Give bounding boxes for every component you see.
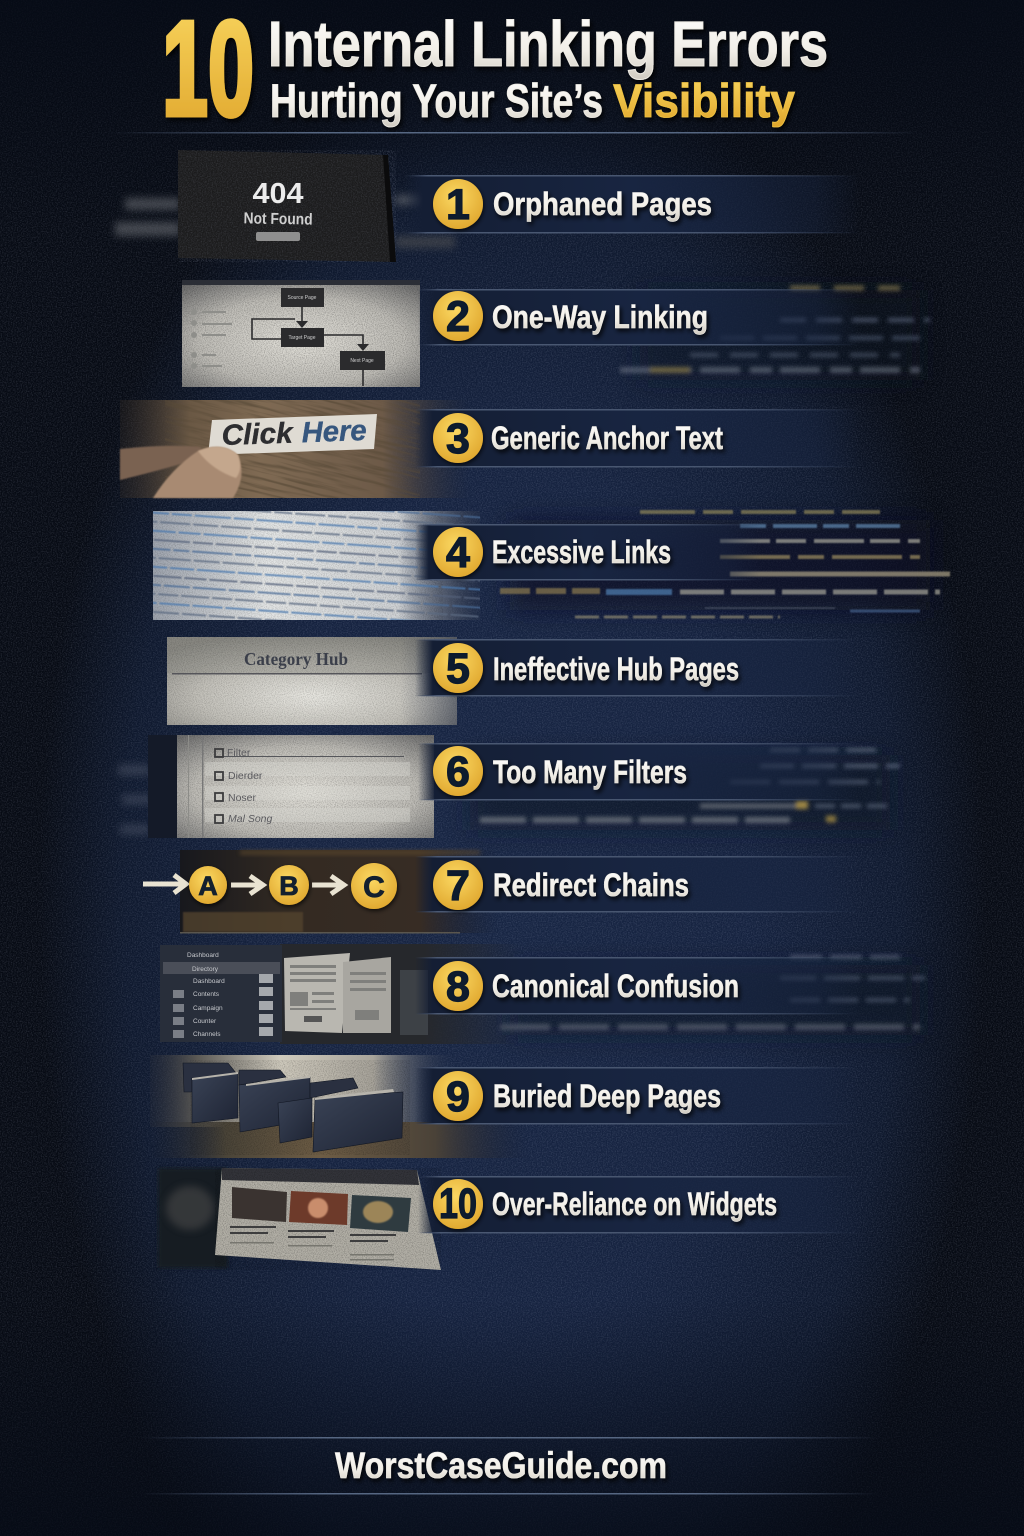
banner: [415, 856, 860, 912]
label: One-Way Linking: [492, 299, 708, 335]
label: Excessive Links: [492, 534, 671, 570]
number badge: 10: [439, 1180, 477, 1228]
footer website: WorstCaseGuide.com: [335, 1445, 667, 1486]
photo: filter checklist: [148, 735, 434, 838]
row 6: too many filters: [118, 735, 900, 838]
title: [162, 0, 828, 144]
number badge: 5: [446, 645, 470, 693]
blurred code background: [620, 288, 930, 380]
duplicate pages: [284, 953, 428, 1035]
sidebar panel: [160, 945, 282, 1042]
number badge: 2: [446, 293, 470, 341]
label: Ineffective Hub Pages: [493, 651, 739, 687]
row 1: orphaned pages: [115, 150, 860, 262]
number badge: 6: [446, 748, 470, 796]
number badge: 7: [446, 862, 470, 910]
arrows: [143, 875, 344, 894]
row 3: generic anchor text: [119, 400, 850, 499]
photo: filter checklist: Noser: [228, 792, 257, 804]
photo: 404 not found screen: Not Found: [243, 210, 313, 229]
photo: A B C redirect chain: [143, 850, 500, 934]
photo: filter checklist: Filter: [227, 747, 251, 759]
row 9: buried deep pages: [150, 1055, 860, 1158]
sidebar panel: Channels: [193, 1031, 221, 1038]
title line two: Hurting Your Site’s: [270, 74, 603, 127]
blurred code background: [500, 512, 950, 617]
label: Generic Anchor Text: [491, 420, 723, 456]
row 4: excessive links: [153, 509, 951, 620]
photo: duplicate pages and panel: [160, 944, 520, 1044]
banner: [418, 743, 860, 800]
photo: stacked folders: [150, 1055, 530, 1158]
title line two: Visibility: [613, 74, 795, 127]
number badge: [433, 643, 483, 693]
photo: flowchart page: Next Page: [350, 358, 374, 364]
number badge: [433, 291, 483, 341]
photo: click here label on wood: [119, 400, 451, 499]
number badge: [433, 1071, 483, 1121]
photo: click here label on wood: Click: [221, 417, 295, 452]
photo: 404 not found screen: [115, 150, 455, 262]
sidebar panel: Dashboard: [193, 978, 225, 985]
sidebar panel: Campaign: [193, 1005, 223, 1012]
number badge: 9: [446, 1073, 470, 1121]
number badge: [433, 179, 483, 229]
number badge: [433, 860, 483, 910]
photo: widget cards page: [158, 1168, 441, 1270]
photo: category hub page: [167, 637, 457, 725]
row 7: redirect chains: [143, 850, 860, 934]
number badge: 3: [446, 415, 470, 463]
banner: [405, 175, 860, 234]
photo: category hub page: Category Hub: [244, 649, 348, 669]
photo: flowchart page: [182, 280, 420, 387]
number badge: [433, 746, 483, 796]
label: Too Many Filters: [493, 754, 687, 790]
number badge: 8: [446, 963, 470, 1011]
label: Orphaned Pages: [493, 186, 712, 222]
circles A B C: [189, 863, 397, 909]
photo: flowchart page: Target Page: [289, 335, 316, 341]
label: Redirect Chains: [493, 867, 689, 903]
number badge: 1: [446, 181, 470, 229]
photo: filter checklist: Mal Song: [228, 813, 273, 825]
number badge: [433, 961, 483, 1011]
row 10: over-reliance on widgets: [158, 1168, 860, 1270]
sidebar panel: Dashboard: [187, 952, 219, 959]
label: Buried Deep Pages: [493, 1078, 721, 1114]
photo: page with many blue links: [153, 511, 480, 620]
banner: [415, 409, 860, 468]
row 2: one-way linking: [182, 280, 930, 387]
sidebar panel: Directory: [192, 966, 219, 973]
banner: [418, 289, 860, 346]
photo: filter checklist: Dierder: [228, 770, 263, 782]
blurred code background: [470, 750, 900, 830]
row 8: canonical confusion: [160, 944, 925, 1044]
banner: [415, 957, 860, 1014]
row 5: ineffective hub pages: [167, 637, 860, 725]
number badge: [433, 527, 483, 577]
photo: A B C redirect chain: A: [198, 871, 218, 901]
photo: 404 not found screen: 404: [252, 178, 304, 210]
photo: A B C redirect chain: B: [279, 871, 299, 901]
banner: [418, 1176, 860, 1234]
banner: [415, 524, 760, 580]
number badge: 4: [446, 529, 470, 577]
blurred code background: [500, 957, 925, 1035]
label: Canonical Confusion: [492, 968, 739, 1004]
banner: [415, 1067, 860, 1124]
sidebar panel: Counter: [193, 1018, 217, 1025]
sidebar panel: Contents: [193, 991, 220, 998]
label: Over-Reliance on Widgets: [492, 1186, 777, 1222]
photo: A B C redirect chain: C: [363, 871, 385, 904]
banner: [415, 639, 860, 696]
photo: flowchart page: Source Page: [288, 295, 317, 301]
title line one: Internal Linking Errors: [268, 8, 828, 80]
number badge: [433, 413, 483, 463]
photo: click here label on wood: Here: [301, 415, 367, 449]
